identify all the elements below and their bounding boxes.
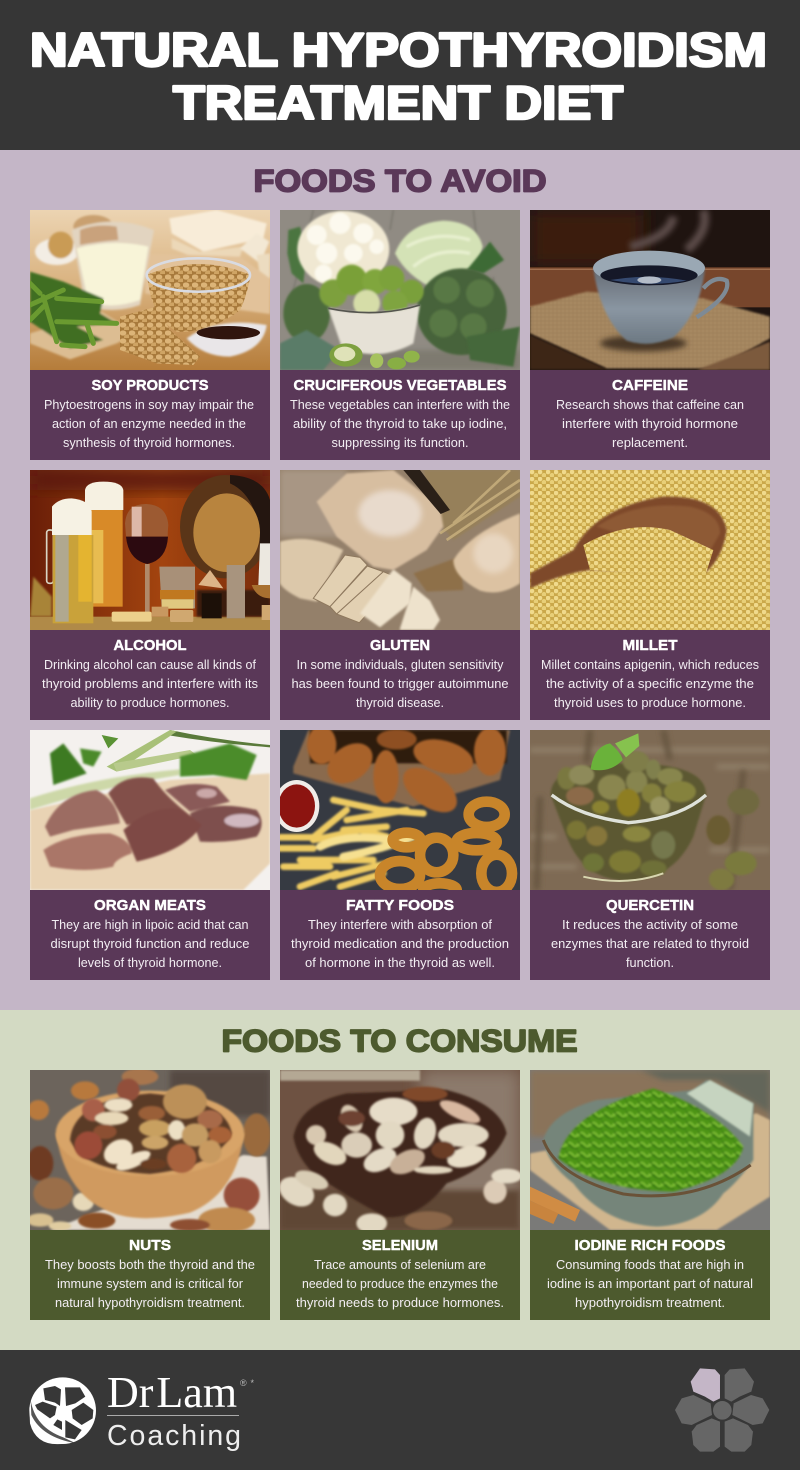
description: Drinking alcohol can cause all kinds of bbox=[44, 657, 256, 672]
description: replacement. bbox=[612, 435, 688, 450]
caption bar bbox=[530, 370, 770, 460]
description: immune system and is critical for bbox=[57, 1276, 244, 1291]
panel: cruciferous vegetables bbox=[280, 210, 520, 460]
caption bar bbox=[530, 890, 770, 980]
description bbox=[291, 917, 509, 970]
title: NATURAL HYPOTHYROIDISM bbox=[30, 23, 767, 76]
description bbox=[541, 657, 759, 710]
label: caffeine: CAFFEINE bbox=[612, 377, 688, 394]
label: millet: MILLET bbox=[622, 637, 678, 654]
photo: bowl of nuts bbox=[30, 1070, 270, 1230]
section: foods to avoid bbox=[0, 150, 800, 1010]
description: suppressing its function. bbox=[332, 435, 468, 450]
photo: millet and wooden spoon bbox=[530, 470, 770, 630]
photo: liver on cutting board bbox=[30, 730, 270, 890]
description bbox=[547, 1257, 753, 1310]
description: function. bbox=[626, 955, 674, 970]
description bbox=[292, 657, 508, 710]
heading: foods to avoid: FOODS TO AVOID bbox=[254, 162, 546, 198]
caption bar bbox=[530, 1230, 770, 1320]
label: selenium: SELENIUM bbox=[362, 1237, 438, 1254]
header band bbox=[0, 0, 800, 150]
panel: gluten bbox=[280, 470, 520, 720]
section: foods to consume bbox=[0, 1010, 800, 1350]
caption bar bbox=[280, 1230, 520, 1320]
description bbox=[50, 917, 250, 970]
label: iodine rich foods: IODINE RICH FOODS bbox=[574, 1237, 726, 1254]
caption bar bbox=[530, 630, 770, 720]
photo: bowl of capers bbox=[530, 730, 770, 890]
photo: seaweed salad bbox=[530, 1070, 770, 1230]
heading: foods to consume: FOODS TO CONSUME bbox=[222, 1022, 578, 1058]
icon: flower emblem bbox=[675, 1368, 769, 1452]
logo: Dr Lam Coaching bbox=[29, 1368, 254, 1452]
title bbox=[30, 23, 767, 129]
description: Consuming foods that are high in bbox=[556, 1257, 744, 1272]
panel: nuts bbox=[27, 1068, 271, 1320]
description: Millet contains apigenin, which reduces bbox=[541, 657, 759, 672]
description: levels of thyroid hormone. bbox=[78, 955, 222, 970]
panel: fatty foods bbox=[274, 726, 520, 980]
description: It reduces the activity of some bbox=[562, 917, 738, 932]
panel: millet bbox=[530, 470, 770, 720]
description bbox=[45, 1257, 255, 1310]
description: In some individuals, gluten sensitivity bbox=[296, 657, 504, 672]
caption bar bbox=[280, 370, 520, 460]
photo: alcoholic drinks bbox=[30, 470, 270, 630]
description: interfere with thyroid hormone bbox=[562, 416, 738, 431]
label: gluten: GLUTEN bbox=[370, 637, 430, 654]
description: Trace amounts of selenium are bbox=[314, 1257, 486, 1272]
label: soy products: SOY PRODUCTS bbox=[92, 377, 208, 394]
panel: soy products bbox=[30, 210, 270, 460]
title: TREATMENT DIET bbox=[173, 76, 623, 129]
panel: iodine rich foods bbox=[530, 1070, 770, 1320]
description bbox=[290, 397, 510, 450]
caption bar bbox=[280, 630, 520, 720]
description: thyroid medication and the production bbox=[291, 936, 509, 951]
description bbox=[42, 657, 258, 710]
description: enzymes that are related to thyroid bbox=[551, 936, 749, 951]
photo: cruciferous vegetables bbox=[280, 210, 520, 370]
description: ability of the thyroid to take up iodine, bbox=[293, 416, 507, 431]
photo: bread and wheat bbox=[280, 470, 520, 630]
description bbox=[556, 397, 744, 450]
label: fatty foods: FATTY FOODS bbox=[346, 897, 454, 914]
description: action of an enzyme needed in the bbox=[52, 416, 246, 431]
description: needed to produce the enzymes the bbox=[302, 1276, 498, 1291]
description: synthesis of thyroid hormones. bbox=[63, 435, 235, 450]
icon: logo flower in circle bbox=[29, 1377, 96, 1444]
description: They boosts both the thyroid and the bbox=[45, 1257, 255, 1272]
panel: alcohol bbox=[30, 470, 270, 720]
caption bar bbox=[30, 630, 270, 720]
description: has been found to trigger autoimmune bbox=[292, 676, 508, 691]
label: alcohol: ALCOHOL bbox=[114, 637, 186, 654]
description: These vegetables can interfere with the bbox=[290, 397, 510, 412]
label: nuts: NUTS bbox=[129, 1237, 171, 1254]
panel: selenium bbox=[274, 1070, 522, 1320]
description: thyroid uses to produce hormone. bbox=[554, 695, 746, 710]
description: Phytoestrogens in soy may impair the bbox=[44, 397, 254, 412]
caption bar bbox=[30, 890, 270, 980]
panel: caffeine bbox=[530, 210, 770, 460]
description bbox=[44, 397, 254, 450]
description: thyroid needs to produce hormones. bbox=[296, 1295, 504, 1310]
description bbox=[551, 917, 749, 970]
registered mark: ®* bbox=[240, 1378, 254, 1388]
description bbox=[296, 1257, 504, 1310]
photo: soy foods bbox=[30, 210, 270, 370]
description: They interfere with absorption of bbox=[308, 917, 492, 932]
description: disrupt thyroid function and reduce bbox=[50, 936, 250, 951]
panel: organ meats bbox=[30, 730, 270, 980]
panel: quercetin bbox=[530, 730, 770, 980]
footer band bbox=[0, 1350, 800, 1470]
caption bar bbox=[30, 370, 270, 460]
description: iodine is an important part of natural bbox=[547, 1276, 753, 1291]
label: quercetin: QUERCETIN bbox=[606, 897, 694, 914]
description: thyroid problems and interfere with its bbox=[42, 676, 258, 691]
description: thyroid disease. bbox=[356, 695, 444, 710]
description: natural hypothyroidism treatment. bbox=[55, 1295, 245, 1310]
logo text: Coaching: Coaching bbox=[107, 1420, 241, 1452]
photo: coffee cup bbox=[530, 210, 770, 370]
logo text: Dr Lam: Dr Lam bbox=[107, 1368, 237, 1417]
label: organ meats: ORGAN MEATS bbox=[94, 897, 206, 914]
description: hypothyroidism treatment. bbox=[575, 1295, 725, 1310]
caption bar bbox=[30, 1230, 270, 1320]
description: Research shows that caffeine can bbox=[556, 397, 744, 412]
photo: fried foods bbox=[280, 730, 520, 890]
description: of hormone in the thyroid as well. bbox=[305, 955, 495, 970]
label: cruciferous vegetables: CRUCIFEROUS VEGETABLES bbox=[294, 377, 506, 394]
description: the activity of a specific enzyme the bbox=[546, 676, 754, 691]
caption bar bbox=[280, 890, 520, 980]
photo: brazil nuts bbox=[280, 1070, 520, 1230]
description: They are high in lipoic acid that can bbox=[52, 917, 248, 932]
description: ability to produce hormones. bbox=[70, 695, 230, 710]
